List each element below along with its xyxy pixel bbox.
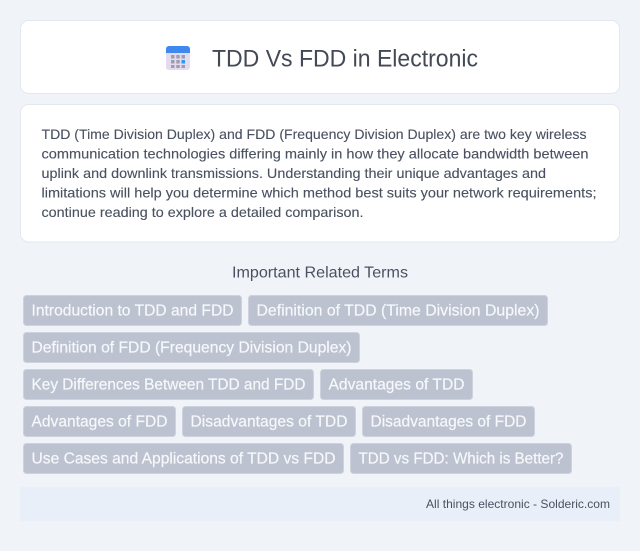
- icon: calendar: [166, 46, 190, 70]
- panel: introduction: [20, 104, 620, 242]
- tag: definition of FDD: Definition of FDD (Frequency Division Duplex): [32, 340, 352, 356]
- tag: use cases: [24, 444, 344, 474]
- tag list: [24, 296, 572, 474]
- tag: disadvantages of TDD: [182, 406, 356, 436]
- tag: disadvantages of FDD: Disadvantages of FDD: [370, 414, 526, 430]
- heading: important related terms: Important Related Terms: [232, 264, 408, 282]
- tag: disadvantages of TDD: Disadvantages of TDD: [190, 414, 348, 430]
- tag: key differences: [24, 370, 314, 400]
- tag: which is better: TDD vs FDD: Which is Better?: [358, 450, 564, 468]
- tag: disadvantages of FDD: [362, 406, 534, 436]
- text block: introduction paragraph: limitations will help you determine which method best suits your network requirements;: [42, 184, 596, 200]
- tag: introduction: Introduction to TDD and FDD: [32, 302, 234, 320]
- footer text: All things electronic - Solderic.com: [426, 497, 610, 511]
- tag: key differences: Key Differences Between TDD and FDD: [32, 376, 306, 394]
- text block: introduction paragraph: communication technologies differing mainly in how they allocate bandwidth between: [42, 146, 588, 162]
- tag: use cases: Use Cases and Applications of TDD vs FDD: [32, 450, 336, 468]
- title: TDD Vs FDD in Electronic: [212, 46, 478, 72]
- text block: introduction paragraph: continue reading to explore a detailed comparison.: [42, 204, 364, 220]
- tag: definition of TDD: [248, 296, 548, 326]
- tag: introduction: [24, 296, 242, 326]
- tag: advantages of FDD: [24, 406, 176, 436]
- tag: advantages of TDD: Advantages of TDD: [328, 376, 464, 394]
- tag: which is better: [350, 444, 572, 474]
- tag: definition of FDD: [24, 332, 360, 362]
- text block: introduction paragraph: uplink and downlink transmissions. Understanding their unique advantages and: [42, 165, 546, 181]
- tag: advantages of FDD: Advantages of FDD: [32, 414, 168, 430]
- tag: advantages of TDD: [320, 370, 472, 400]
- panel: header: [20, 20, 620, 94]
- footer: [20, 487, 620, 521]
- text block: introduction paragraph: TDD (Time Division Duplex) and FDD (Frequency Division Duplex) are two key wireless: [42, 126, 586, 142]
- text block: introduction paragraph: [42, 126, 596, 220]
- tag: definition of TDD: Definition of TDD (Time Division Duplex): [256, 302, 540, 320]
